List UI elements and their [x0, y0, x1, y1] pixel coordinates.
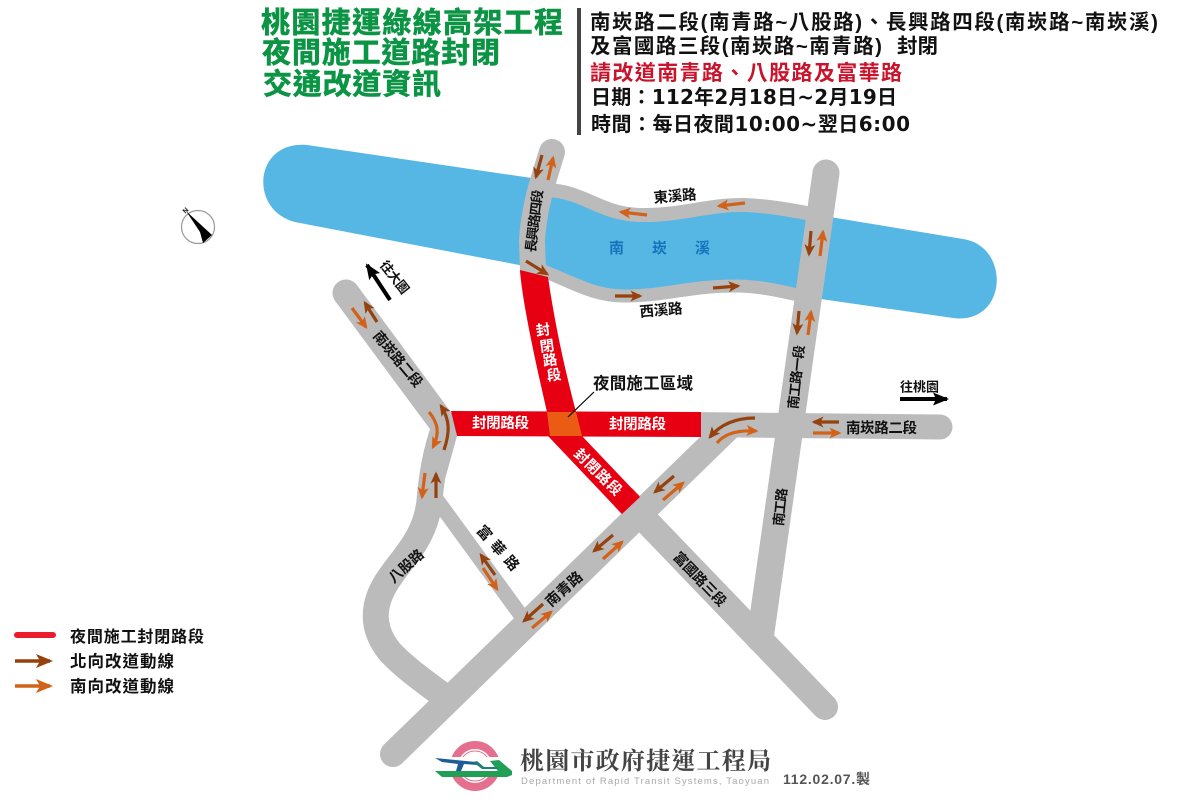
closed section south-east: [548, 436, 640, 514]
direction arrow: to Dayuan: 往大園: [377, 258, 412, 297]
label: north closed section: 路: [542, 351, 559, 370]
date stamp: 112.02.07.製: [783, 771, 870, 787]
label: north closed section: [535, 320, 563, 385]
header divider: [577, 8, 581, 135]
road: Fuguo Rd: [625, 499, 825, 707]
department name: 桃園市政府捷運工程局: [520, 741, 771, 776]
callout: night construction zone: 夜間施工區域: [593, 373, 694, 393]
label: Bagu Rd: 八股路: [385, 546, 427, 586]
label: Nankan Rd section 2 east: 南崁路二段: [846, 419, 918, 437]
logo: department of rapid transit systems: [435, 745, 513, 787]
legend: closed road: 夜間施工封閉路段: [70, 627, 204, 646]
icon: north compass: N: [182, 207, 190, 215]
callout: night construction zone: [568, 373, 694, 417]
closed road sections: [451, 270, 701, 514]
legend: northbound detour: [15, 652, 174, 671]
closure information text: 封閉: [897, 35, 938, 58]
title: 夜間施工道路封閉: [262, 36, 500, 70]
direction arrow: to Taoyuan: [900, 380, 947, 399]
title: 交通改道資訊: [263, 68, 441, 101]
direction arrow: to Taoyuan: 往桃園: [900, 380, 939, 394]
label: creek name: 崁: [652, 240, 667, 257]
road labels: [370, 185, 918, 610]
river: [263, 145, 997, 318]
legend: northbound detour: 北向改道動線: [70, 652, 174, 671]
label: Nanqing Rd: 南青路: [542, 568, 587, 610]
road: Bagu Rd: [376, 425, 445, 697]
label: Nangong Rd: 南工路: [771, 487, 790, 527]
road network: [346, 152, 940, 754]
label: west closed section: 封閉路段: [472, 414, 530, 432]
closed section labels: [472, 320, 666, 500]
label: Nankan Rd section 2 west: 南崁路二段: [370, 328, 426, 390]
closure information text: 日期：112年2月18日~2月19日: [591, 85, 897, 109]
title: [261, 6, 563, 101]
road junction west: [420, 408, 457, 490]
label: creek name: 南: [609, 240, 624, 257]
label: West Creek Rd: 西溪路: [639, 299, 684, 321]
road: Nankan Rd section 2 west: [346, 293, 440, 420]
road: Nankan Rd section 2 east: [690, 424, 940, 427]
night construction zone: [547, 412, 582, 436]
label: Fuhua Rd: 富華路: [473, 522, 523, 575]
road: west creek: [535, 268, 802, 296]
icon: north compass: [182, 207, 214, 244]
closed section north: [520, 270, 576, 412]
label: east closed section: 封閉路段: [609, 415, 666, 433]
title: 桃園捷運綠線高架工程: [261, 6, 563, 40]
legend: southbound detour: [15, 677, 174, 696]
label: creek name: 溪: [695, 239, 710, 257]
label: north closed section: 閉: [539, 337, 555, 356]
road: Changxing Rd: [532, 152, 552, 272]
department name: Department of Rapid Transit Systems, Taoyuan: [521, 776, 769, 787]
detour arrows: [352, 155, 839, 628]
road: Nangong Rd: [760, 173, 826, 639]
road: east creek: [548, 190, 812, 215]
label: Changxing Rd: 長興路四段: [522, 188, 546, 253]
closure information text: 南崁路二段(南青路~八股路)、長興路四段(南崁路~南崁溪): [590, 10, 1158, 34]
closure information text: [590, 10, 1158, 136]
label: Nangong Rd section 1: 南工路一段: [785, 344, 807, 410]
closure information text: 及富國路三段(南崁路~南青路): [590, 34, 882, 58]
label: Fuguo Rd section 3: 富國路三段: [670, 549, 730, 609]
road: Fuhua Rd: [437, 500, 520, 614]
label: creek name: [609, 239, 710, 257]
label: north closed section: 段: [546, 365, 563, 385]
legend: southbound detour: 南向改道動線: [70, 677, 174, 696]
label: East Creek Rd: 東溪路: [653, 185, 698, 207]
legend: [15, 627, 204, 696]
label: north closed section: 封: [535, 320, 551, 340]
road: Nanqing Rd: [393, 429, 727, 754]
closure information text: 請改道南青路、八股路及富華路: [590, 61, 902, 85]
closed section west and east: [451, 411, 701, 437]
closure information text: 時間：每日夜間10:00~翌日6:00: [591, 112, 910, 136]
label: south-east closed section: 封閉路段: [570, 445, 626, 500]
